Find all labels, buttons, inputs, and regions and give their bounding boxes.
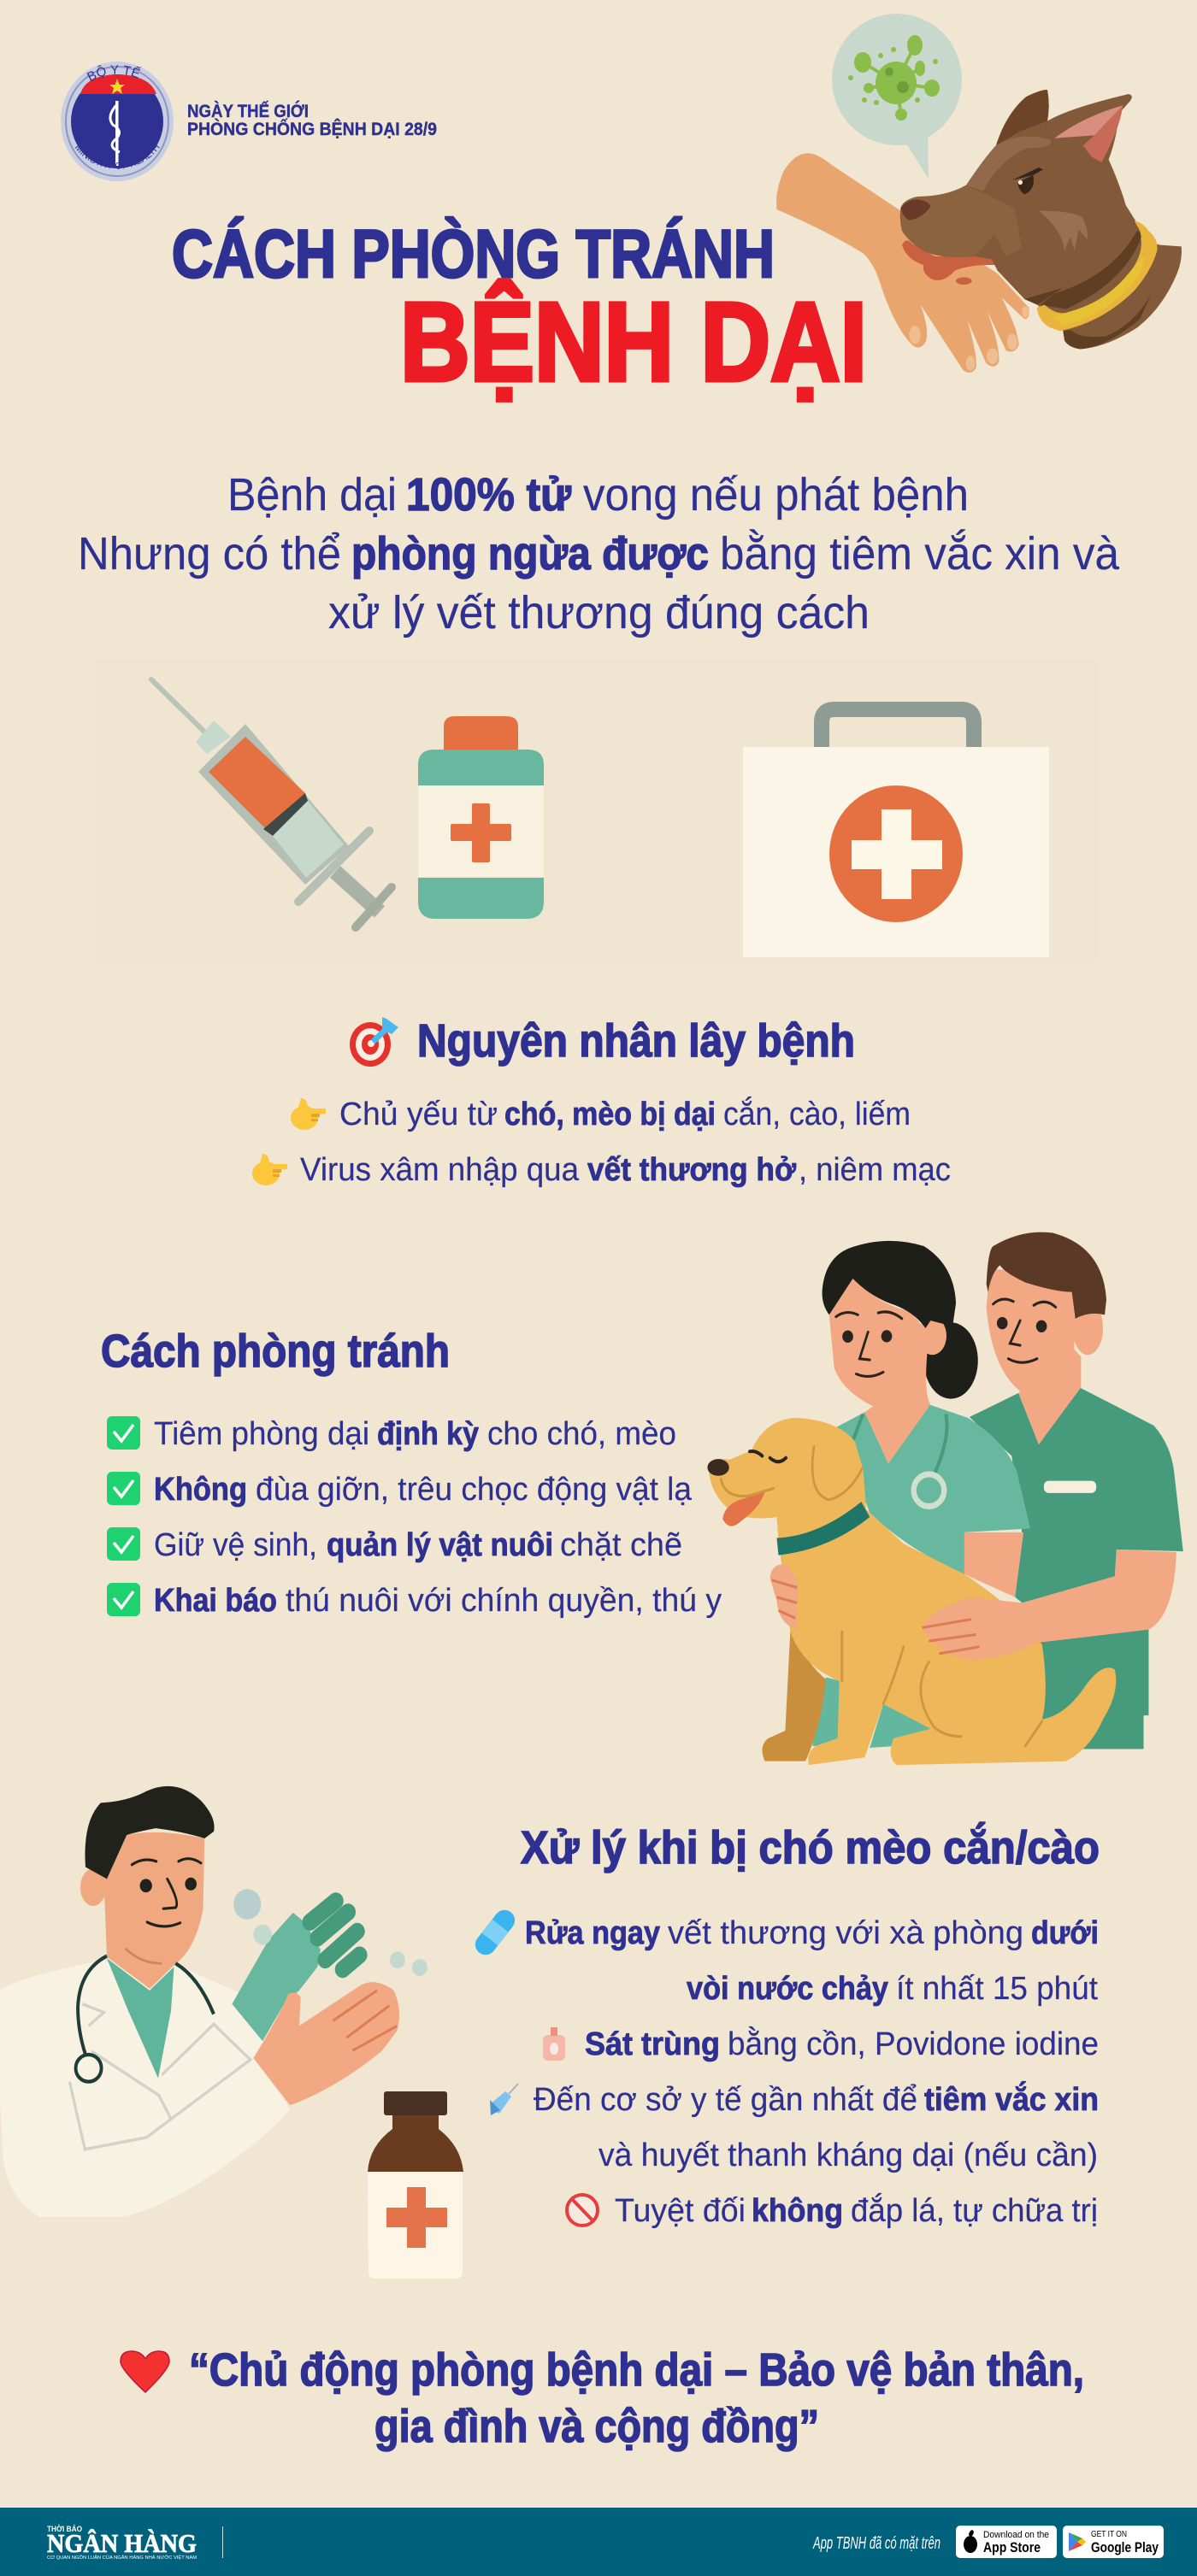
icon: syringe (151, 679, 392, 927)
prevention item 3: Giữ vệ sinh, (154, 1527, 317, 1563)
prevention item 2: Không (154, 1472, 247, 1508)
icon: first aid kit (743, 709, 1049, 957)
header label: world rabies day (187, 101, 437, 139)
header label: world rabies day: PHÒNG CHỐNG BỆNH DẠI 28/9 (187, 119, 437, 139)
treatment step 4: Tuyệt đối (615, 2193, 746, 2229)
title: cách phòng tránh: CÁCH PHÒNG TRÁNH (172, 215, 775, 291)
icon: pointing hand (291, 1098, 326, 1130)
treatment step 1: dưới (1031, 1915, 1099, 1951)
illustration: antiseptic bottle (368, 2091, 463, 2279)
treatment step 4: đắp lá, tự chữa trị (851, 2192, 1098, 2229)
treatment step 3 (490, 2080, 1099, 2173)
section heading: prevention: Cách phòng tránh (101, 1326, 450, 1377)
woman (924, 1322, 978, 1399)
intro text: phòng ngừa được (351, 528, 709, 579)
treatment step 4: không (752, 2193, 843, 2229)
icon: pointing hand (252, 1154, 287, 1185)
treatment step 1 (471, 1906, 1099, 2007)
treatment step 2 (543, 2026, 1099, 2062)
illustration: dog head (900, 90, 1182, 349)
intro text (78, 469, 1120, 638)
treatment step 1: ít nhất 15 phút (896, 1971, 1098, 2007)
icon: small syringe (490, 2084, 518, 2115)
prevention item 3: quản lý vật nuôi (327, 1527, 553, 1563)
cause line 1: chó, mèo bị dại (504, 1097, 716, 1132)
intro text: xử lý vết thương đúng cách (328, 587, 870, 638)
prevention item 4: thú nuôi với chính quyền, thú y (286, 1583, 722, 1619)
icon: prohibited (567, 2195, 598, 2226)
section heading: wound treatment: Xử lý khi bị chó mèo cắn/cào (521, 1822, 1100, 1873)
treatment step 3: tiêm vắc xin (924, 2080, 1099, 2118)
closing quote: “Chủ động phòng bệnh dại – Bảo vệ bản thân, (189, 2344, 1084, 2396)
illustration: speech bubble with virus (832, 14, 962, 179)
treatment step 4 (567, 2192, 1098, 2229)
prevention item 1: định kỳ (377, 1416, 479, 1452)
icon: target (350, 1017, 398, 1067)
icon: lotion bottle (543, 2027, 565, 2061)
prevention item 4: Khai báo (154, 1583, 277, 1619)
logo: Ministry of Health: MINISTRY OF HEALTH (75, 145, 160, 169)
prevention item 1 (107, 1416, 676, 1452)
intro text: Nhưng có thể (78, 528, 341, 579)
logo: Ministry of Health (61, 62, 174, 181)
cause line 2: , niêm mạc (799, 1152, 951, 1188)
treatment step 2: bằng cồn, Povidone iodine (728, 2026, 1099, 2062)
prevention item 1: Tiêm phòng dại (154, 1416, 369, 1452)
intro text: 100% tử (406, 469, 572, 520)
badge: Google Play: Google Play (1091, 2539, 1159, 2555)
badge: App Store: Download on the (983, 2530, 1049, 2540)
cause line 2 (252, 1152, 951, 1188)
footer logo: Thời báo Ngân hàng: NGÂN HÀNG (47, 2528, 197, 2558)
prevention item 1: cho chó, mèo (487, 1416, 676, 1452)
treatment step 2: Sát trùng (585, 2026, 720, 2062)
prevention item 3 (107, 1527, 682, 1563)
cause line 1: Chủ yếu từ (339, 1097, 498, 1132)
section heading: causes: Nguyên nhân lây bệnh (417, 1015, 855, 1067)
icon: medicine bottle (418, 716, 544, 919)
treatment step 1: vết thương với xà phòng (668, 1915, 1023, 1951)
illustration: arm being bitten by dog (776, 153, 1029, 373)
closing quote: gia đình và cộng đồng” (374, 2401, 819, 2452)
icon: heart (121, 2351, 169, 2392)
cause line 1 (291, 1096, 911, 1132)
icon: bandage (471, 1906, 519, 1959)
footer logo: Thời báo Ngân hàng: THỜI BÁO (47, 2524, 82, 2533)
illustration panel: medical supplies (96, 658, 1100, 963)
logo: Ministry of Health: BỘ Y TẾ (87, 65, 142, 81)
badge: Google Play (1063, 2526, 1164, 2558)
cause line 2: Virus xâm nhập qua (300, 1152, 580, 1188)
illustration: doctor with gloves (0, 1786, 428, 2217)
closing quote (121, 2344, 1084, 2452)
icon: green check (107, 1472, 140, 1505)
man (970, 1387, 1183, 1749)
icon: green check (107, 1583, 140, 1616)
illustration: vets with dog (707, 1232, 1183, 1765)
treatment step 1: vòi nước chảy (687, 1971, 888, 2007)
icon: green check (107, 1416, 140, 1450)
cause line 1: cắn, cào, liếm (723, 1096, 911, 1132)
footer logo: Thời báo Ngân hàng: CƠ QUAN NGÔN LUẬN CỦA NGÂN HÀNG NHÀ NƯỚC VIỆT NAM (47, 2554, 197, 2561)
title: bệnh dại: BỆNH DẠI (400, 279, 867, 404)
intro text: bằng tiêm vắc xin và (720, 528, 1120, 579)
treatment step 3: Đến cơ sở y tế gần nhất để (534, 2082, 917, 2118)
badge: App Store: App Store (983, 2539, 1041, 2555)
intro text: Bệnh dại (227, 469, 397, 520)
treatment step 3: và huyết thanh kháng dại (nếu cần) (598, 2138, 1098, 2173)
badge: Google Play: GET IT ON (1091, 2530, 1127, 2539)
header label: world rabies day: NGÀY THẾ GIỚI (187, 101, 309, 121)
man's arm over dog (923, 1550, 1176, 1660)
cause line 2: vết thương hở (587, 1152, 797, 1188)
badge: App Store (956, 2526, 1057, 2558)
app availability text: App TBNH đã có mặt trên (812, 2534, 940, 2553)
footer bar (0, 2508, 1197, 2576)
prevention item 2: đùa giỡn, trêu chọc động vật lạ (256, 1472, 693, 1508)
prevention item 3: chặt chẽ (560, 1527, 682, 1563)
dog (812, 1677, 932, 1748)
icon: green check (107, 1527, 140, 1561)
intro text: vong nếu phát bệnh (583, 469, 969, 520)
woman's hand (770, 1565, 798, 1630)
treatment step 1: Rửa ngay (525, 1915, 660, 1951)
